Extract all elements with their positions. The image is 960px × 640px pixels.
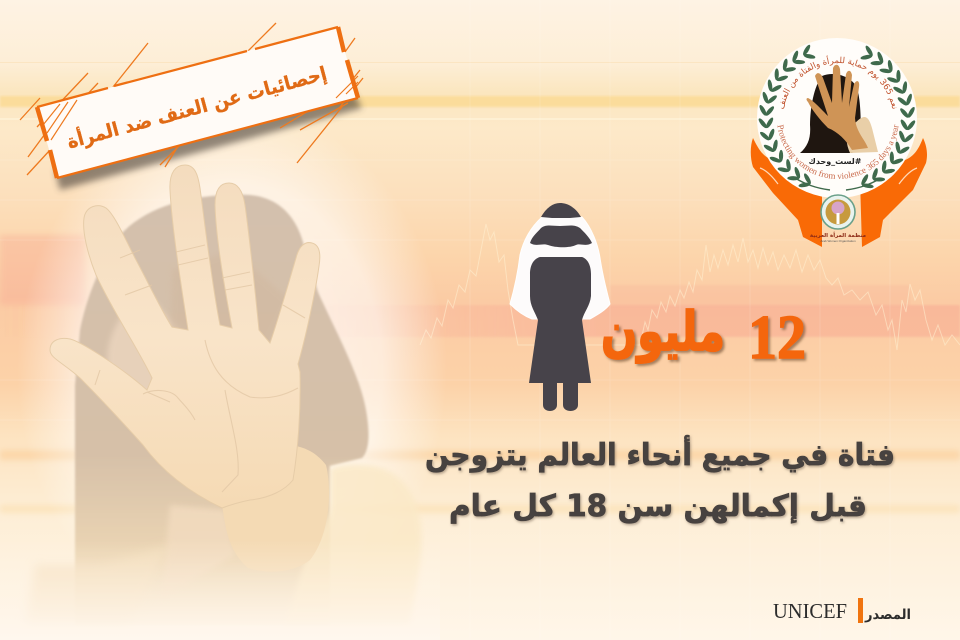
decorative diagonal lines bbox=[20, 23, 363, 175]
banner shadow bbox=[55, 90, 362, 190]
icon: veiled girl bride bbox=[510, 203, 610, 411]
source name: UNICEF bbox=[773, 599, 847, 623]
source label: المصدر bbox=[864, 607, 911, 623]
hand with five fingers bbox=[50, 165, 320, 508]
white glow behind woman bbox=[17, 105, 447, 635]
face shadow bbox=[107, 290, 195, 395]
hair bbox=[75, 195, 369, 625]
photo: woman raising her hand bbox=[0, 105, 447, 640]
banner title: إحصائيات عن العنف ضد المرأة bbox=[64, 61, 329, 153]
arab women organization emblem: منظمة المرأة العربية bbox=[810, 231, 866, 239]
legs bbox=[543, 382, 578, 411]
neck and chest bbox=[160, 505, 235, 600]
logo: 365 days protecting women bbox=[750, 38, 927, 247]
body and dress bbox=[529, 257, 591, 383]
hair band bbox=[530, 226, 592, 247]
palm creases bbox=[95, 245, 305, 492]
hatch on banner corner bbox=[43, 76, 358, 140]
sleeve bbox=[285, 464, 422, 625]
arab women organization emblem: Arab Women Organization bbox=[820, 239, 856, 243]
heading text bbox=[425, 435, 895, 524]
banner: statistics on violence against women bbox=[20, 23, 363, 190]
number 12: 12 bbox=[748, 304, 806, 372]
source divider bbox=[858, 598, 863, 623]
logo photo: woman with hand bbox=[800, 65, 878, 153]
banner orange border bbox=[37, 27, 358, 178]
arab women organization emblem bbox=[810, 195, 866, 243]
word million: مليون bbox=[601, 300, 725, 363]
veil bbox=[510, 217, 610, 319]
logo white circle bbox=[757, 38, 917, 198]
source bbox=[773, 598, 911, 623]
wrist bbox=[222, 446, 329, 572]
line one: فتاة في جميع أنحاء العالم يتزوجن bbox=[425, 435, 895, 473]
laurel wreath bbox=[757, 43, 917, 193]
waveform lines bbox=[420, 224, 960, 350]
statistic: 12 million bbox=[601, 300, 806, 372]
orange cupped hands bbox=[751, 138, 822, 247]
hair top bbox=[541, 203, 581, 218]
logo english arc text: Protecting women from violence 365 days a year bbox=[778, 124, 898, 179]
bottom fade bbox=[0, 540, 440, 640]
logo arabic arc text: نعم 365 يوم حماية للمرأة والفتاة من العنف bbox=[780, 56, 896, 109]
logo hashtag: #لست_وحدك bbox=[808, 157, 862, 166]
line two: قبل إكمالهن سن 18 كل عام bbox=[449, 489, 867, 524]
shoulder bbox=[25, 545, 170, 625]
banner card bbox=[37, 27, 358, 178]
